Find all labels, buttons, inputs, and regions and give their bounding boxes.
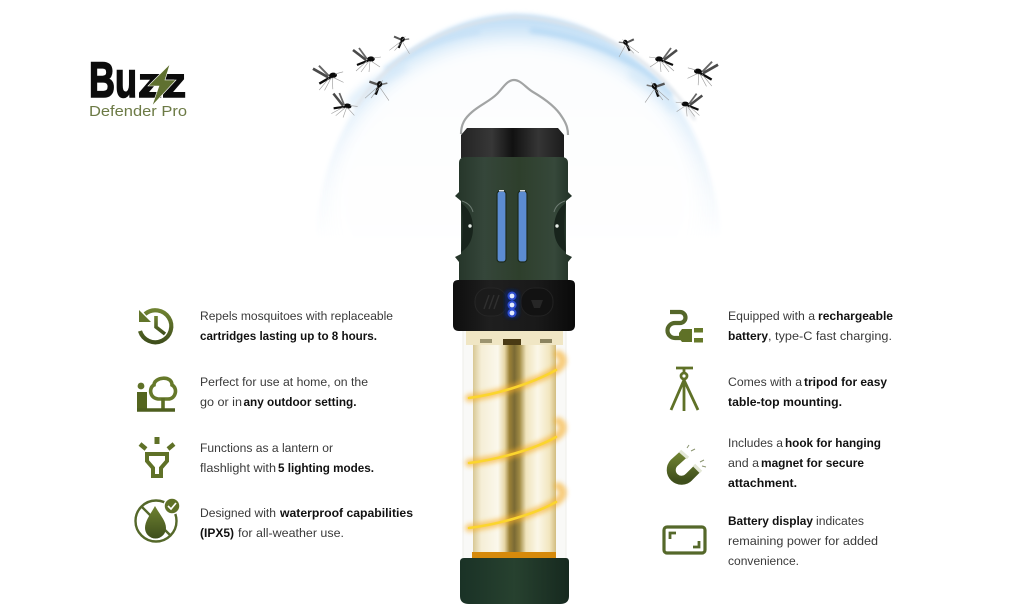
text: lantern — [200, 441, 374, 475]
text: battery: rechargeable — [818, 309, 893, 323]
text: tripod: table-top mounting. — [728, 395, 842, 409]
lantern — [453, 80, 575, 604]
icon: magnet — [671, 445, 706, 480]
feature list right — [664, 309, 893, 568]
text: battery display: Battery display — [728, 514, 813, 528]
gold cylinder — [466, 331, 563, 560]
blue uv tubes — [497, 190, 527, 262]
text: battery — [728, 309, 893, 343]
text: outdoor: Perfect for use at home, on the — [200, 375, 368, 389]
lantern handle — [461, 80, 568, 135]
mosquitoes left — [313, 34, 413, 120]
text: waterproof: waterproof capabilities — [279, 506, 413, 520]
glowing led spiral — [469, 354, 563, 528]
text: hook and magnet: magnet for secure — [761, 456, 864, 470]
battery indicator lights — [505, 290, 519, 318]
text: battery display: indicates — [816, 514, 864, 528]
text: waterproof: for all-weather use. — [238, 526, 344, 540]
text: waterproof: (IPX5) — [200, 526, 234, 540]
glass tube — [463, 328, 566, 560]
mosquitoes right — [615, 36, 718, 116]
text: waterproof: Designed with — [200, 506, 276, 520]
logo: zz — [138, 59, 186, 106]
icon: tripod — [671, 368, 698, 411]
text: battery display: remaining power for added — [728, 534, 878, 548]
text: hook and magnet: attachment. — [728, 476, 797, 490]
text: outdoor: any outdoor setting. — [244, 395, 356, 409]
logo — [89, 52, 187, 120]
text: battery: battery — [728, 329, 768, 343]
feature list left — [136, 309, 413, 542]
text: cartridges: cartridges lasting up to 8 hours. — [200, 329, 377, 343]
lantern cap — [461, 128, 564, 158]
text: waterproof — [200, 506, 413, 540]
logo: Defender Pro — [89, 103, 187, 120]
body cutouts — [461, 201, 566, 252]
text: battery display: convenience. — [728, 554, 799, 568]
control band — [453, 280, 575, 331]
icon: clock history — [139, 310, 171, 342]
text: hook and magnet: Includes a — [728, 436, 783, 450]
protective dome — [316, 14, 722, 380]
icon: battery display — [664, 527, 705, 553]
green body — [455, 157, 572, 281]
text: hook and magnet: hook for hanging — [785, 436, 881, 450]
text: battery: Equipped with a — [728, 309, 815, 323]
logo: Bu — [89, 52, 137, 108]
icon: charging plug — [668, 312, 703, 342]
text: lantern: 5 lighting modes. — [278, 461, 374, 475]
icon: flashlight — [140, 437, 174, 476]
text: cartridges: Repels mosquitoes with replaceable — [200, 309, 393, 323]
text: cartridges — [200, 309, 393, 343]
text: hook and magnet: and a — [728, 456, 759, 470]
text: battery display — [728, 514, 878, 568]
text: outdoor — [200, 375, 368, 409]
text: lantern: Functions as a lantern or — [200, 441, 333, 455]
base — [460, 558, 569, 604]
text: tripod — [728, 375, 887, 409]
text: hook and magnet — [728, 436, 881, 490]
band buttons — [475, 288, 553, 316]
text: outdoor: go or in — [200, 395, 242, 409]
text: battery: , type-C fast charging. — [768, 329, 892, 343]
text: tripod: tripod for easy — [804, 375, 887, 389]
text: lantern: flashlight with — [200, 461, 276, 475]
text: tripod: Comes with a — [728, 375, 802, 389]
icon: person and tree — [137, 378, 175, 410]
icon: water resistant — [136, 498, 180, 542]
